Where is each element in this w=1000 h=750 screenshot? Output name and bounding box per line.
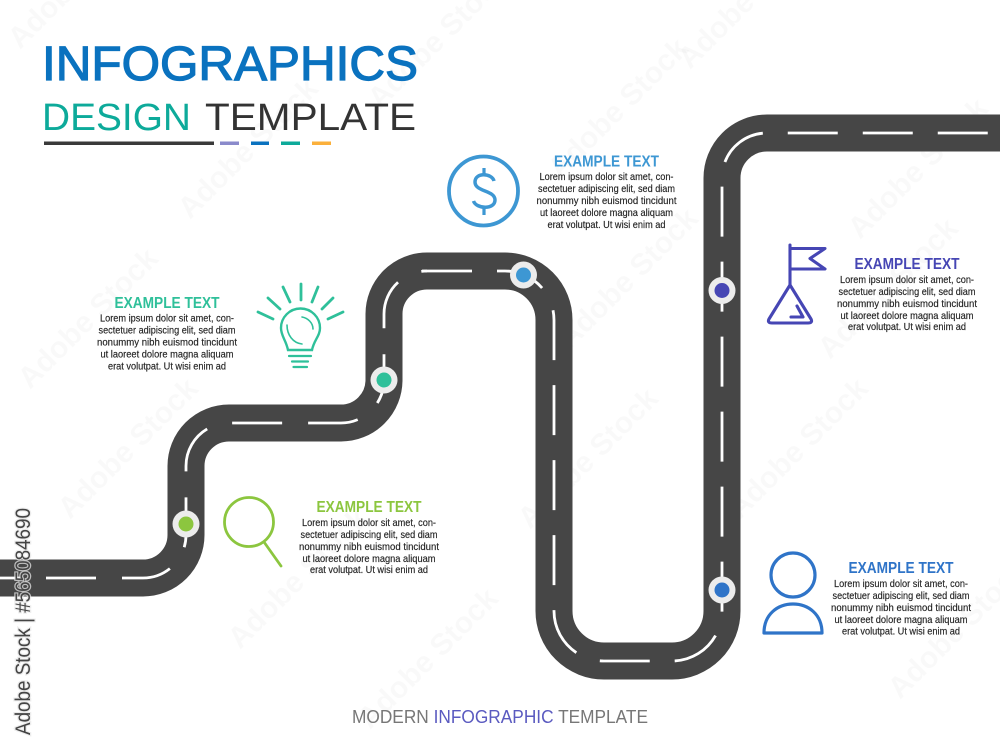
icon: dollar [449, 156, 518, 226]
text block: green: ut laoreet dolore magna aliquam [302, 554, 436, 565]
title [42, 38, 418, 145]
text block: blue bottom: Lorem ipsum dolor sit amet, con- [834, 579, 968, 590]
text block: blue bottom: sectetuer adipiscing elit, sed diam [832, 591, 970, 602]
text block: purple: Lorem ipsum dolor sit amet, con- [840, 275, 974, 286]
text block: blue: sectetuer adipiscing elit, sed diam [538, 184, 675, 195]
road [0, 133, 1000, 661]
icon: magnifier [224, 498, 281, 566]
text block: blue bottom [831, 560, 971, 638]
text block: green: EXAMPLE TEXT [316, 499, 422, 516]
text block: green teal: EXAMPLE TEXT [114, 295, 220, 312]
text block: green: nonummy nibh euismod tincidunt [299, 542, 439, 553]
text block: blue: EXAMPLE TEXT [554, 154, 659, 170]
text block: blue bottom: nonummy nibh euismod tincidunt [831, 603, 971, 614]
icon: light bulb [258, 284, 343, 367]
text block: purple: ut laoreet dolore magna aliquam [840, 311, 974, 322]
title: DESIGN [42, 97, 191, 139]
text block: blue bottom: erat volutpat. Ut wisi enim ad [842, 626, 960, 638]
text block: blue bottom: EXAMPLE TEXT [848, 560, 954, 577]
text block: blue [536, 154, 677, 231]
marker: teal [370, 366, 398, 394]
text block: blue: Lorem ipsum dolor sit amet, con- [540, 172, 674, 183]
text block: green teal: ut laoreet dolore magna aliquam [100, 350, 234, 360]
icon: flag [768, 245, 825, 323]
text block: green teal: sectetuer adipiscing elit, sed diam [98, 326, 236, 336]
text block: blue: ut laoreet dolore magna aliquam [540, 208, 673, 219]
text block: green: erat volutpat. Ut wisi enim ad [310, 565, 428, 576]
text block: blue: nonummy nibh euismod tincidunt [536, 196, 677, 207]
stock credit: Adobe Stock | #565084690 [12, 508, 35, 735]
text block: blue: erat volutpat. Ut wisi enim ad [548, 220, 666, 231]
text block: purple: sectetuer adipiscing elit, sed diam [838, 287, 976, 298]
text block: green: Lorem ipsum dolor sit amet, con- [302, 518, 436, 529]
title: INFOGRAPHICS [42, 38, 418, 91]
text block: green teal: erat volutpat. Ut wisi enim ad [108, 362, 226, 372]
text block: purple: nonummy nibh euismod tincidunt [837, 299, 977, 310]
text block: green teal [97, 295, 237, 372]
marker: blue bottom [708, 576, 736, 604]
text block: green teal: Lorem ipsum dolor sit amet, con- [100, 314, 234, 324]
text block: green teal: nonummy nibh euismod tincidunt [97, 338, 237, 348]
marker: purple [708, 277, 736, 304]
icon: person [764, 553, 822, 633]
text block: purple: erat volutpat. Ut wisi enim ad [848, 322, 966, 333]
text block: purple [837, 256, 977, 333]
marker: blue top [510, 262, 537, 288]
text block: green [299, 499, 439, 576]
footer caption: MODERN INFOGRAPHIC TEMPLATE [352, 706, 648, 727]
text block: purple: EXAMPLE TEXT [854, 256, 960, 273]
title: TEMPLATE [205, 97, 416, 139]
text block: green: sectetuer adipiscing elit, sed diam [300, 530, 438, 541]
marker: green [172, 510, 200, 538]
text block: blue bottom: ut laoreet dolore magna aliquam [834, 615, 968, 626]
